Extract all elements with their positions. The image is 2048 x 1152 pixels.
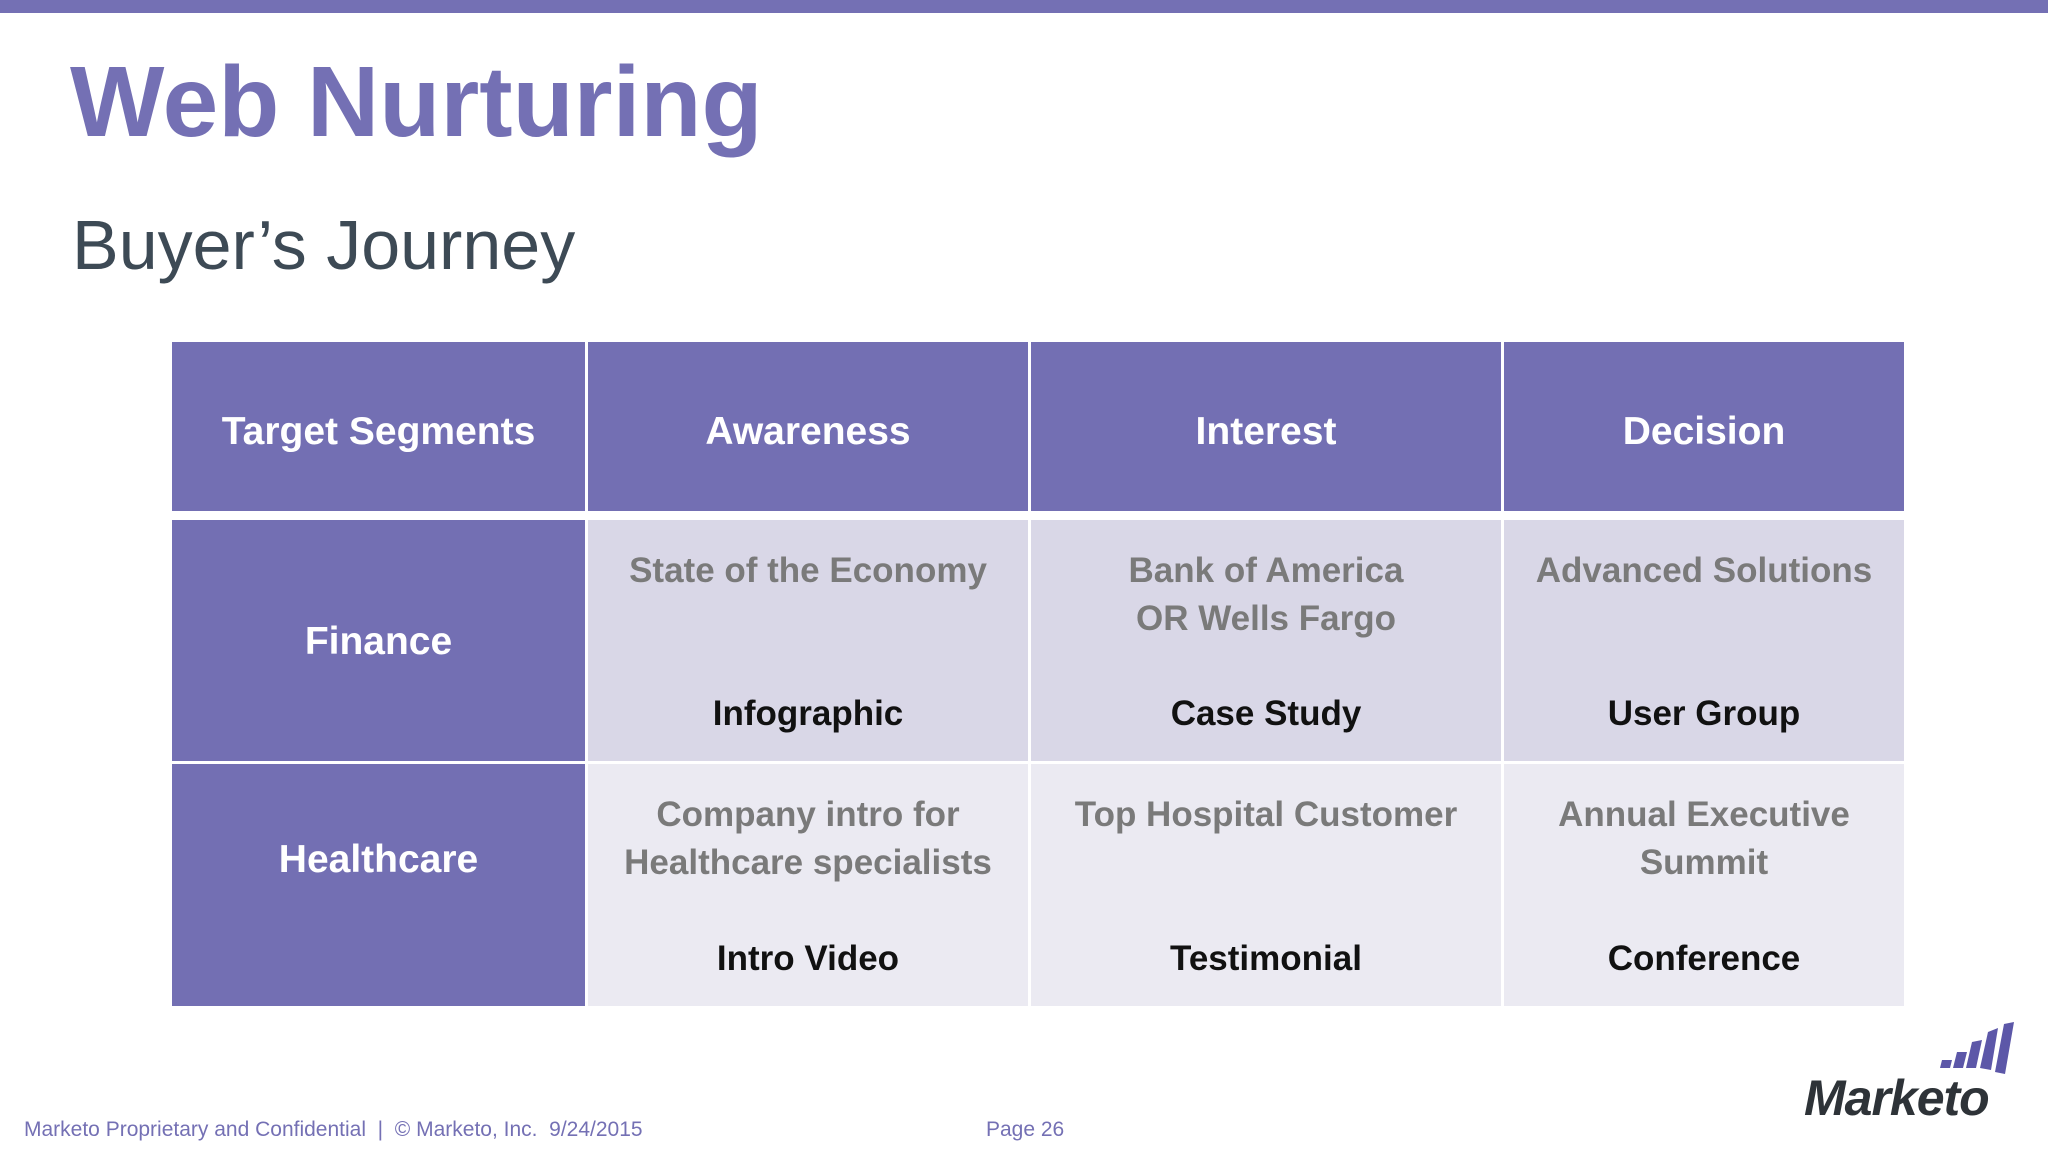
row label: finance [172,520,585,761]
cell: healthcare decision: Summit [1640,843,1768,882]
cell: healthcare awareness [588,764,1028,1006]
table [172,342,1904,1006]
cell: healthcare decision: Conference [1608,939,1800,978]
cell: healthcare interest [1031,764,1501,1006]
header: interest: Interest [1196,410,1336,452]
header: target segments [172,342,585,511]
cell: healthcare interest: Testimonial [1170,939,1362,978]
header: awareness [588,342,1028,511]
cell: healthcare awareness: Intro Video [717,939,899,978]
cell: healthcare decision [1504,764,1904,1006]
header: awareness: Awareness [705,410,911,452]
footer text: Marketo Proprietary and Confidential | © Marketo, Inc. 9/24/2015 [24,1118,643,1141]
cell: healthcare awareness: Healthcare specialists [624,843,992,882]
cell: healthcare decision: Annual Executive [1558,795,1850,834]
logo: marketo [1804,1022,2014,1126]
row label: healthcare: Healthcare [279,838,478,881]
icon: bars [1940,1022,2014,1074]
cell: finance interest: OR Wells Fargo [1136,599,1396,638]
cell: healthcare awareness: Company intro for [656,795,960,834]
header: target segments: Target Segments [222,410,535,452]
header: decision [1504,342,1904,511]
cell: finance interest [1031,520,1501,761]
cell: finance decision [1504,520,1904,761]
row label: healthcare [172,764,585,1006]
cell: finance awareness [588,520,1028,761]
row label: finance: Finance [305,620,452,662]
logo text: Marketo [1804,1070,1989,1126]
cell: healthcare interest: Top Hospital Customer [1075,795,1457,834]
header: decision: Decision [1623,410,1785,452]
cell: finance awareness: State of the Economy [629,551,987,590]
title: Web Nurturing [70,46,763,158]
cell: finance awareness: Infographic [713,694,903,733]
subtitle: Buyer’s Journey [72,206,575,284]
page number: Page 26 [986,1118,1064,1141]
cell: finance decision: Advanced Solutions [1536,551,1872,590]
top bar [0,0,2048,13]
header: interest [1031,342,1501,511]
cell: finance decision: User Group [1608,694,1800,733]
cell: finance interest: Case Study [1171,694,1361,733]
cell: finance interest: Bank of America [1129,551,1403,590]
